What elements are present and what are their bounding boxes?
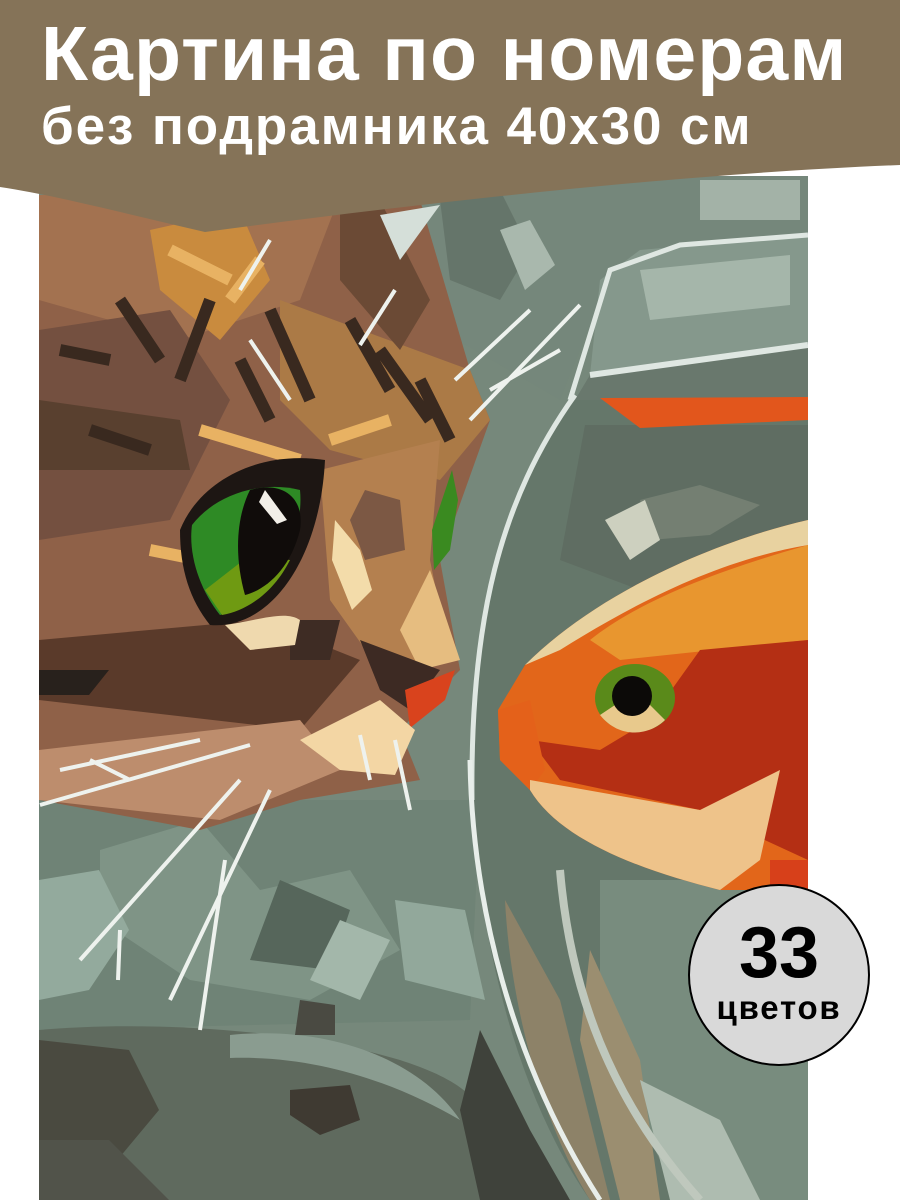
fur strokes [60, 300, 450, 450]
bowl rim highlights [472, 395, 575, 800]
cat fur [39, 195, 490, 830]
whiskers [40, 240, 580, 1030]
glass bowl right side [472, 400, 808, 1200]
fish eye [595, 664, 675, 732]
badge: number of colours: 33 [739, 913, 819, 993]
cat eye [180, 458, 325, 625]
lower dark table [39, 1026, 520, 1200]
fish [498, 520, 808, 890]
banner [0, 0, 900, 232]
subtitle: без подрамника 40х30 см [41, 97, 752, 156]
cat nose [360, 640, 440, 710]
badge: number of colours: цветов [716, 989, 842, 1026]
badge: number of colours [688, 884, 870, 1066]
background grey-green [39, 194, 596, 1200]
title: Картина по номерам [41, 11, 847, 97]
